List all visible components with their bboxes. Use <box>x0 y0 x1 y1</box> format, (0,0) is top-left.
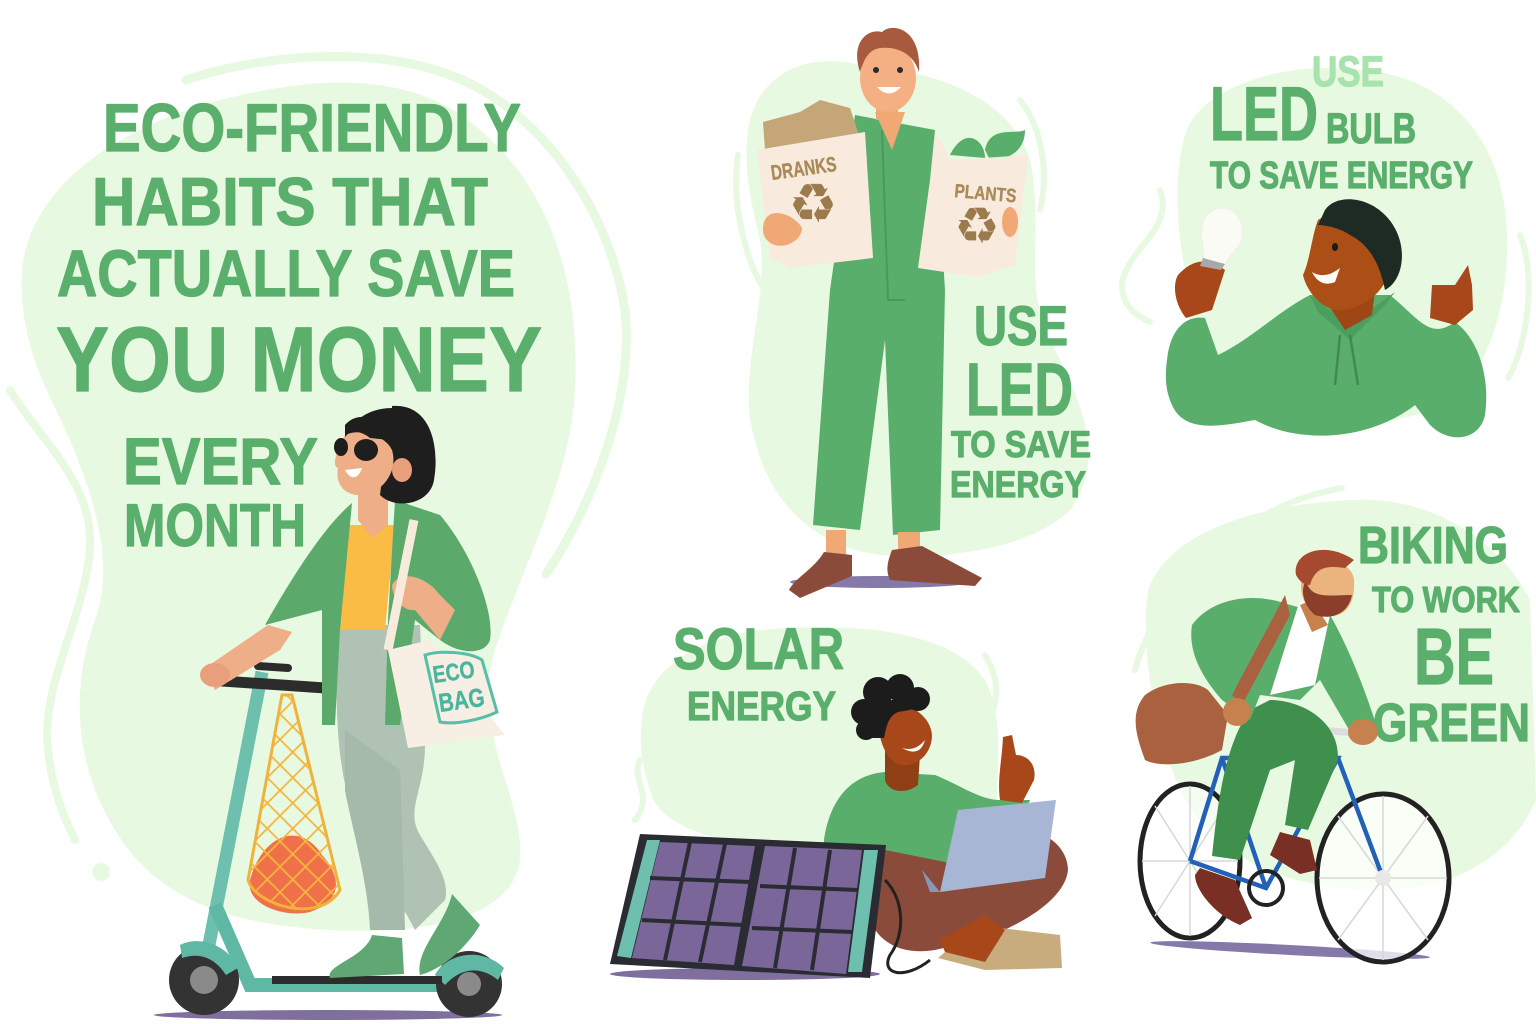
hands <box>1175 262 1225 318</box>
panel: recycling man <box>736 28 1091 598</box>
head <box>1300 600 1328 632</box>
main title: YOU MONEY <box>56 309 542 411</box>
arms <box>205 625 292 690</box>
panel: solar energy <box>610 617 1068 980</box>
icon: light bulb <box>1200 208 1243 270</box>
illustration: woman riding scooter <box>154 406 505 1020</box>
text: biking to work be green: BIKING <box>1358 517 1508 575</box>
man in green jumpsuit <box>789 28 982 598</box>
main title: HABITS THAT <box>92 164 488 240</box>
text: use LED bulb: BULB <box>1326 105 1416 153</box>
panel: LED bulb man <box>1122 48 1529 437</box>
icon: eco bag: BAG <box>437 682 486 718</box>
text: use LED bulb: LED <box>1210 72 1318 157</box>
yellow top <box>338 525 395 630</box>
man with laptop <box>824 674 1068 970</box>
messenger bag <box>1136 683 1228 764</box>
text: use LED bulb: TO SAVE ENERGY <box>1210 155 1473 197</box>
main title: ACTUALLY SAVE <box>57 236 515 310</box>
text: use LED bulb: USE <box>1312 48 1384 96</box>
icon: plants bag: PLANTS <box>954 181 1017 207</box>
icon: plants bag: ♻ <box>955 197 999 255</box>
main title <box>56 90 542 559</box>
icon: kick scooter <box>169 666 504 1017</box>
shoes <box>1195 868 1252 925</box>
icon: eco bag: ECO <box>431 656 476 689</box>
legs feet <box>826 530 846 558</box>
icon: eco bag <box>388 520 505 748</box>
icon: mesh bag with fruit <box>248 695 340 913</box>
icon: drinks bag: ♻ <box>789 172 837 235</box>
text: use LED to save energy: TO SAVE <box>951 424 1091 465</box>
main title: ECO-FRIENDLY <box>103 90 521 166</box>
icon: plants bag <box>918 130 1028 277</box>
bearded cyclist <box>1136 550 1378 925</box>
laptop <box>940 800 1056 892</box>
icon: bicycle <box>1140 730 1449 962</box>
text: use LED bulb <box>1210 48 1473 197</box>
front leg <box>345 730 405 930</box>
hand pointing <box>999 735 1035 803</box>
text: solar energy: ENERGY <box>687 683 836 729</box>
icon: solar panel <box>610 834 930 980</box>
back leg <box>336 625 446 930</box>
main title: EVERY <box>123 424 318 498</box>
legs <box>870 829 1068 951</box>
shoes <box>330 935 404 978</box>
man in green hoodie <box>1166 199 1486 437</box>
text: use LED to save energy <box>950 294 1091 505</box>
text: use LED to save energy: USE <box>974 294 1068 357</box>
text: solar energy: SOLAR <box>673 617 844 682</box>
main title: MONTH <box>124 492 306 559</box>
text: use LED to save energy: ENERGY <box>950 464 1086 505</box>
text: biking to work be green: BE <box>1414 612 1494 701</box>
head <box>358 475 388 538</box>
panel: main eco habits scene <box>10 56 626 1020</box>
panel: biking man <box>1135 488 1536 962</box>
icon: drinks bag <box>757 100 873 268</box>
icon: drinks bag: DRANKS <box>769 153 838 185</box>
cardigan <box>265 503 352 725</box>
text: use LED to save energy: LED <box>966 348 1073 431</box>
text: biking to work be green <box>1358 517 1530 753</box>
shadow <box>790 576 970 588</box>
text: solar energy <box>673 617 844 729</box>
